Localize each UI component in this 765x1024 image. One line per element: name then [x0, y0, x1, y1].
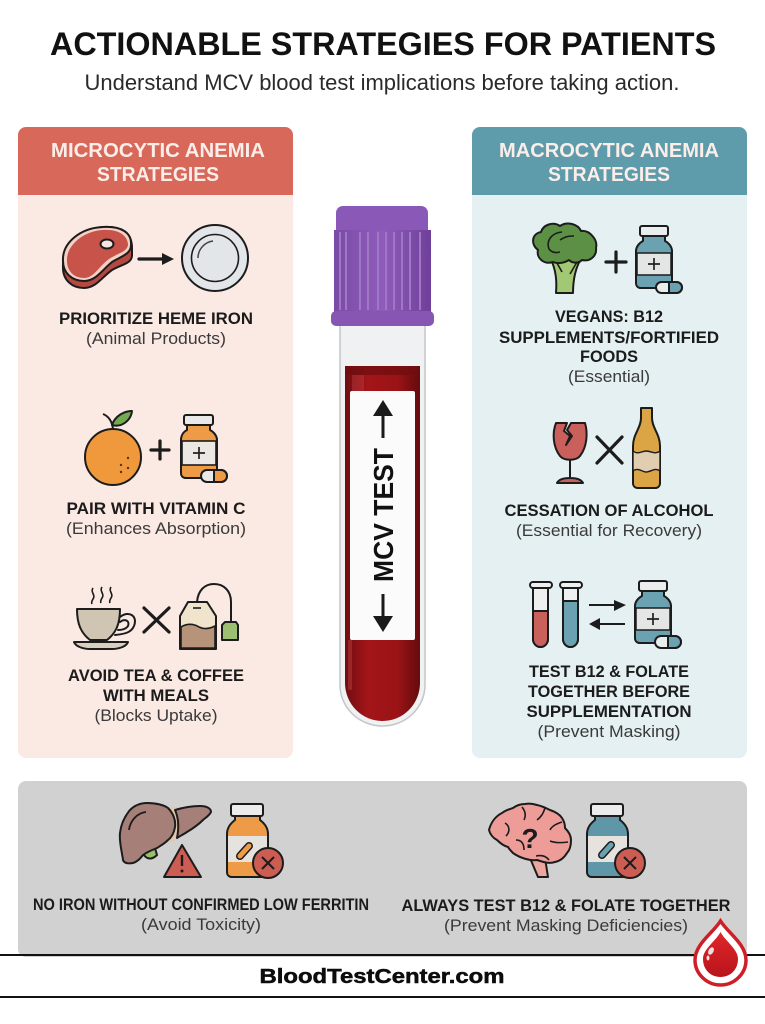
icon: broccoli plus b12 bottle	[533, 224, 682, 293]
icon: liver, warning triangle, iron bottle	[120, 803, 283, 878]
footer site name: BloodTestCenter.com	[260, 966, 504, 988]
text: vegans b12: (Essential)	[568, 367, 650, 386]
panel: microcytic anemia strategies	[18, 127, 293, 758]
text: pair with vitamin c: (Enhances Absorption)	[66, 519, 246, 538]
text: test b12 and folate: (Prevent Masking)	[538, 722, 680, 741]
text: prioritize heme iron: PRIORITIZE HEME IRON	[59, 309, 253, 328]
text: always test b12 and folate together: (Prevent Masking Deficiencies)	[444, 916, 688, 935]
text: test b12 and folate: SUPPLEMENTATION	[526, 702, 692, 721]
icon: orange plus vitamin bottle	[85, 411, 227, 485]
text: always test b12 and folate together	[402, 896, 730, 935]
text: pair with vitamin c: PAIR WITH VITAMIN C	[66, 499, 246, 518]
panel header: microcytic	[18, 127, 293, 195]
icon: steak to plate	[63, 225, 248, 291]
text: vegans b12: FOODS	[580, 347, 638, 366]
text: avoid tea and coffee	[68, 666, 244, 725]
subtitle: Understand MCV blood test implications before taking action.	[84, 70, 680, 95]
text: cessation of alcohol: CESSATION OF ALCOHOL	[504, 501, 714, 520]
text: prioritize heme iron	[59, 309, 253, 348]
panel: macrocytic anemia strategies	[472, 127, 747, 758]
text: avoid tea and coffee: (Blocks Uptake)	[94, 706, 218, 725]
icon: two test tubes, arrows, bottle	[530, 581, 681, 648]
text: vegans b12: VEGANS: B12	[555, 307, 663, 326]
panel header: microcytic: STRATEGIES	[97, 163, 219, 186]
icon: coffee and tea crossed	[74, 584, 238, 649]
text: avoid tea and coffee: AVOID TEA & COFFEE	[68, 666, 244, 685]
text: test b12 and folate	[526, 662, 692, 741]
icon: brain with question mark, b12 bottle	[489, 804, 645, 878]
text: pair with vitamin c	[66, 499, 246, 538]
text: no iron without confirmed low ferritin: (Avoid Toxicity)	[141, 915, 261, 934]
text: avoid tea and coffee: WITH MEALS	[103, 686, 209, 705]
cap	[331, 206, 434, 326]
panel header: macrocytic: STRATEGIES	[548, 163, 670, 186]
text: no iron without confirmed low ferritin	[33, 895, 369, 934]
text: cessation of alcohol	[504, 501, 714, 540]
tube glass	[340, 324, 425, 726]
text: vegans b12	[499, 307, 719, 386]
panel header: microcytic: MICROCYTIC ANEMIA	[51, 139, 265, 162]
logo: blood drop	[695, 921, 746, 985]
text: no iron without confirmed low ferritin: NO IRON WITHOUT CONFIRMED LOW FERRITIN	[33, 895, 369, 914]
panel header: macrocytic: MACROCYTIC ANEMIA	[499, 139, 719, 162]
text: prioritize heme iron: (Animal Products)	[86, 329, 226, 348]
panel: warnings	[18, 781, 747, 957]
icon: brain with question mark, b12 bottle: ?	[521, 823, 539, 854]
text: always test b12 and folate together: ALWAYS TEST B12 & FOLATE TOGETHER	[402, 896, 730, 915]
title: ACTIONABLE STRATEGIES FOR PATIENTS	[50, 26, 716, 62]
blood test tube	[331, 206, 434, 726]
label: MCV TEST	[368, 448, 399, 582]
label	[350, 391, 415, 640]
panel header: macrocytic	[472, 127, 747, 195]
footer band	[0, 954, 765, 998]
icon: broken wine glass and beer bottle	[554, 408, 660, 488]
text: test b12 and folate: TOGETHER BEFORE	[528, 682, 690, 701]
text: cessation of alcohol: (Essential for Recovery)	[516, 521, 702, 540]
text: test b12 and folate: TEST B12 & FOLATE	[529, 662, 689, 681]
text: vegans b12: SUPPLEMENTS/FORTIFIED	[499, 328, 719, 347]
blood	[345, 366, 420, 721]
